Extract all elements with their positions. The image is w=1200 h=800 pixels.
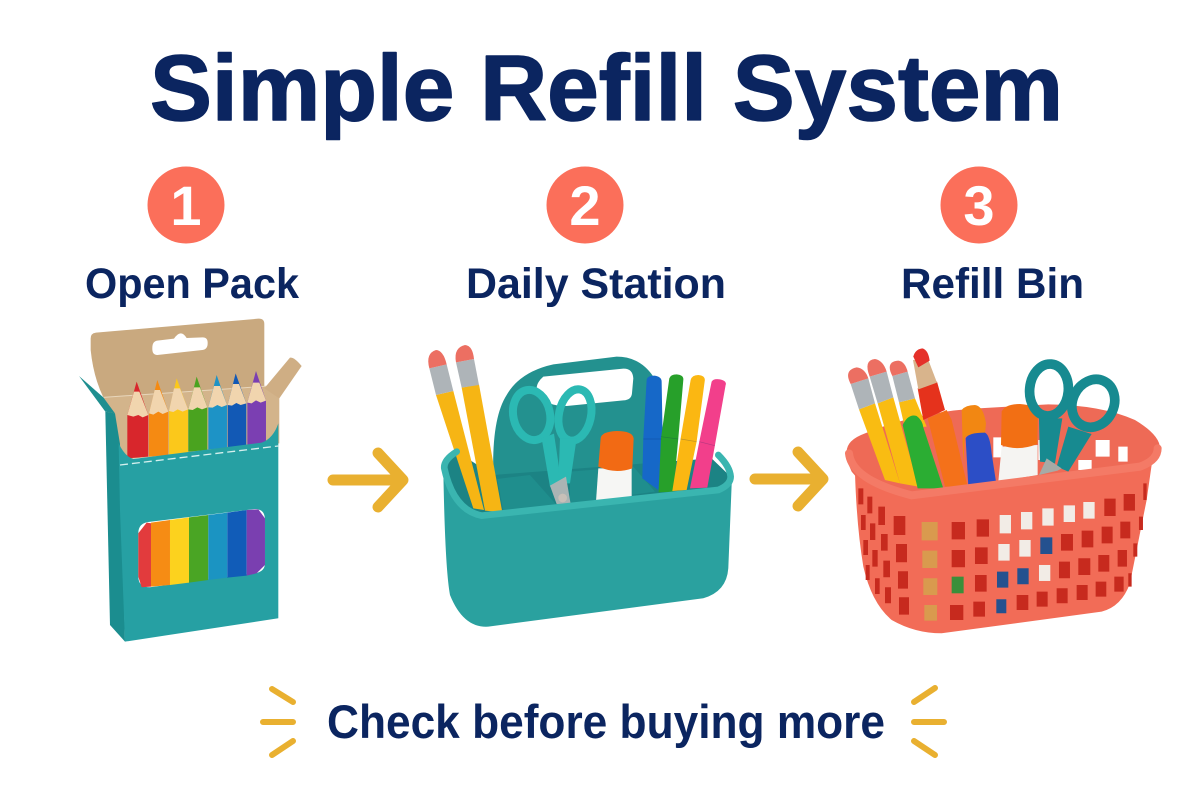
glue stick [596,468,632,502]
step 1 number badge [148,166,224,244]
pack body [105,412,125,642]
orange and blue glue pens [962,405,986,463]
step 3 heading: Refill Bin [901,260,1084,308]
icon: coral refill bin with supplies [847,348,1160,633]
step 1 number badge: 1 [170,174,202,237]
green marker [903,415,943,488]
interior [444,452,731,518]
seven pencils [127,382,148,458]
step 2 number badge: 2 [569,174,601,237]
title: Simple Refill System [150,36,1063,140]
pencils [859,403,900,483]
bin front [855,465,1152,633]
white glue stick [998,445,1038,482]
step 3 number badge [940,166,1018,244]
arrow: station to refill bin [755,452,823,506]
interior [103,385,279,460]
step 3 number badge: 3 [963,174,995,237]
markers [642,376,663,490]
side holes and front holes [858,483,1147,620]
pencils [436,391,484,510]
caddy handle and back panel [493,357,653,475]
call to action text: Check before buying more [327,695,885,748]
icon: teal daily station caddy with supplies [428,345,732,627]
rim [849,448,1158,495]
red pencil [918,382,945,420]
scissors [508,386,596,444]
left sparkle burst [263,689,293,755]
step 2 number badge [546,166,624,244]
pack back flap with hang tab [91,319,264,397]
step 2 heading: Daily Station [466,260,726,308]
window pencils [138,509,265,587]
right sparkle burst [914,688,944,755]
step 1 heading: Open Pack [85,260,299,308]
bin back wall and rim [847,404,1160,499]
orange marker [928,410,968,487]
caddy body [443,470,732,627]
arrow: pack to station [333,453,403,507]
teal scissors [1027,362,1122,434]
icon: open pack of coloured pencils [79,319,302,642]
